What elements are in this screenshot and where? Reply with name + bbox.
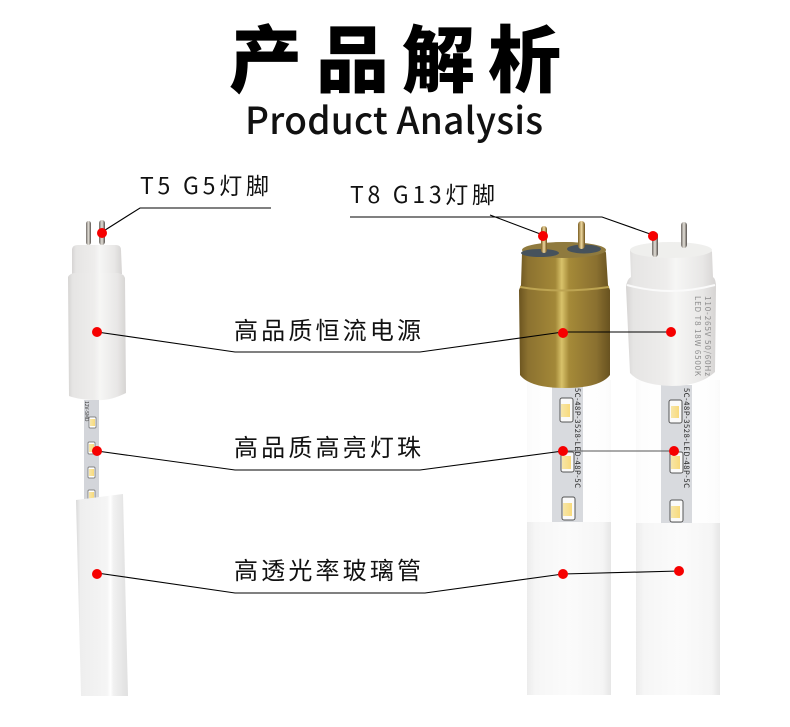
gold glass tube	[527, 522, 611, 695]
white LED strip	[661, 385, 692, 523]
gold LED strip	[552, 385, 583, 523]
faint tube body, white	[636, 380, 720, 525]
T5 power supply housing	[68, 273, 126, 400]
label: LED beads: 高品质高亮灯珠	[234, 428, 421, 463]
label: T8 G13: T8 G13灯脚	[350, 176, 495, 210]
white cap shoulder	[627, 285, 715, 291]
title: chinese heading: 产	[229, 2, 302, 108]
leader lines	[97, 208, 679, 593]
label: T5 G5: T5 G5灯脚	[140, 167, 269, 201]
T5 LED strip	[83, 400, 99, 500]
gold pins	[541, 221, 585, 253]
title: chinese heading: 解	[402, 2, 475, 108]
cap print: 110-265V 50/60Hz	[702, 296, 713, 376]
red marker dots	[92, 228, 684, 579]
T5 tube	[68, 220, 128, 696]
cap print: LED T8 18W 6500K	[692, 296, 703, 377]
gold end cap	[519, 242, 610, 388]
T5 glass tube	[76, 494, 128, 696]
title: chinese heading: 析	[488, 2, 561, 108]
T5 LED strip: 12V-SMD	[83, 401, 90, 422]
white end cap	[626, 242, 716, 386]
faint tube body, gold	[527, 380, 611, 525]
white glass tube	[636, 523, 720, 695]
T8 white tube	[626, 222, 720, 695]
title: chinese heading	[229, 2, 561, 108]
gold sockets	[521, 244, 601, 257]
label: glass tube: 高透光率玻璃管	[234, 551, 421, 586]
gold LED strip: 5C-48P-3528-LED-48P-5C	[572, 388, 583, 488]
subtitle: english heading: Product Analysis	[245, 91, 543, 145]
white LED strip: 5C-48P-3528-LED-48P-5C	[681, 388, 692, 488]
label: power supply: 高品质恒流电源	[234, 311, 421, 346]
T8 gold tube	[519, 221, 611, 695]
gold cap collar	[520, 287, 609, 290]
T5 pins	[86, 220, 105, 245]
title: chinese heading: 品	[316, 2, 389, 108]
T5 end cap	[72, 245, 122, 274]
cap print	[692, 296, 713, 377]
white pins	[652, 222, 687, 257]
